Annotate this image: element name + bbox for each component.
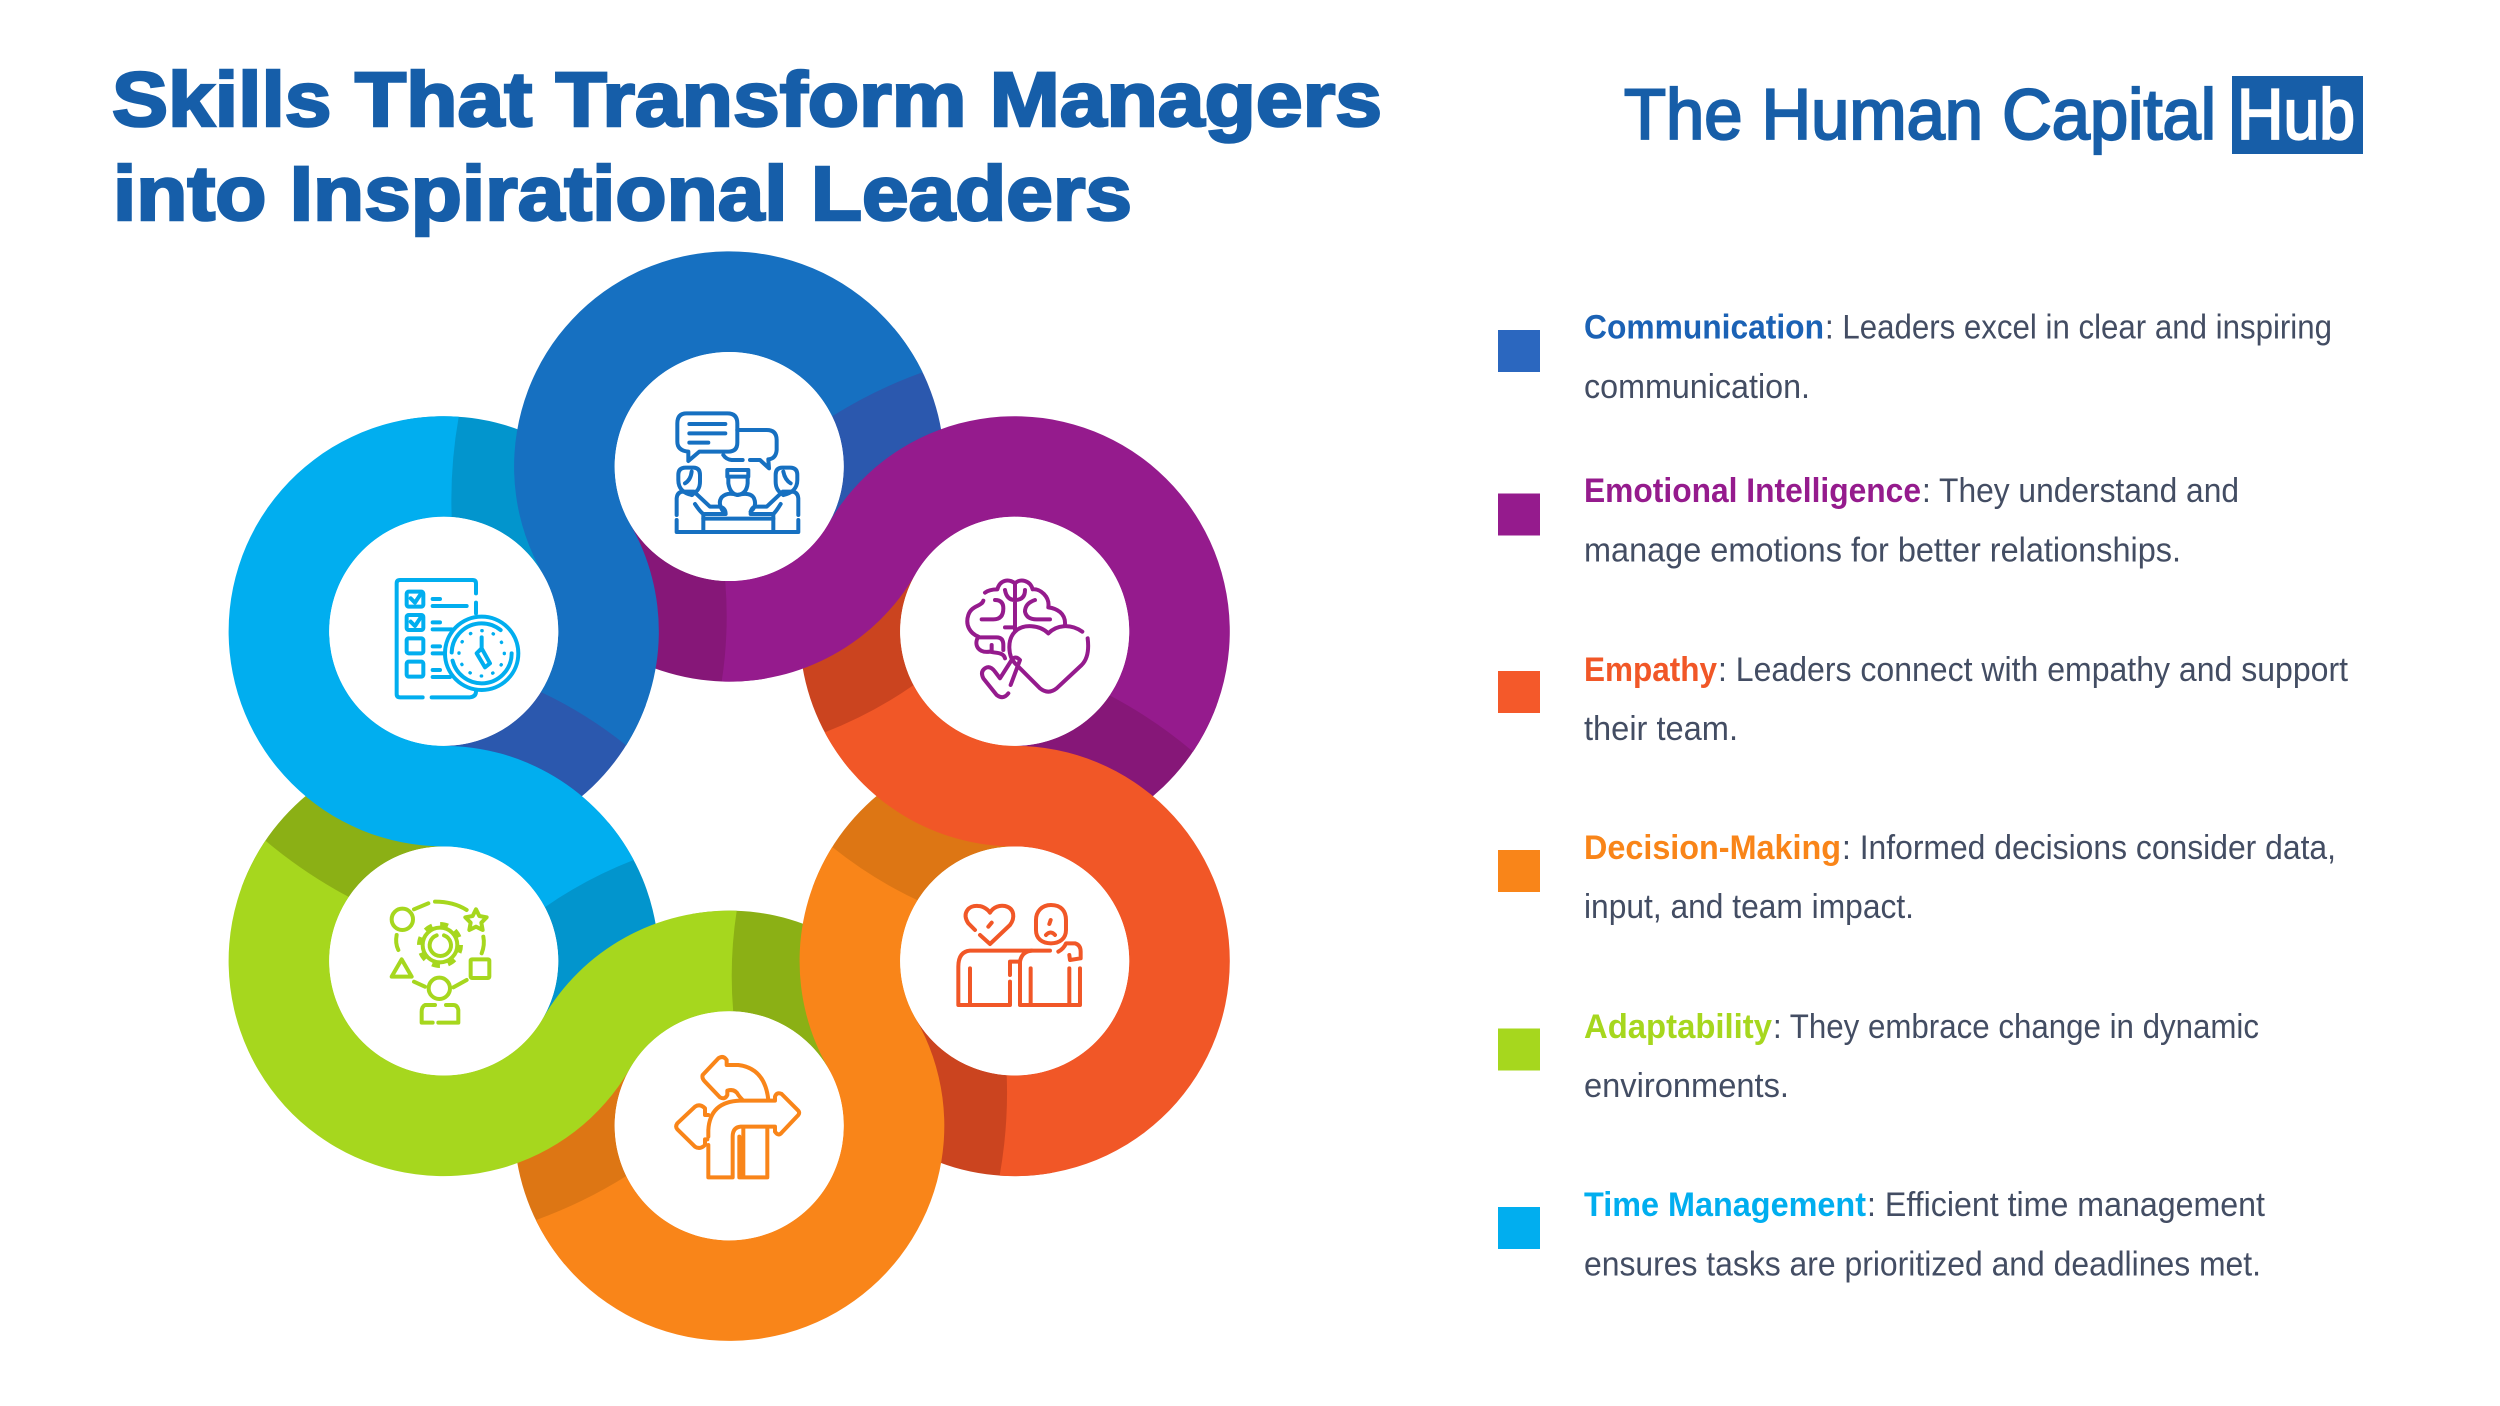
ribbon: emotional intelligence (666, 337, 1298, 938)
ribbon: empathy (677, 635, 1309, 1236)
logo: The Human Capital Hub: Hub (2237, 76, 2355, 155)
legend: time management: : Efficient time management (1867, 1186, 2266, 1224)
legend: communication: Communication (1584, 308, 1824, 346)
legend: adaptability: environments. (1584, 1067, 1789, 1105)
legend: decision-making: : Informed decisions consider data, (1842, 829, 2336, 867)
ribbon dark ends (181, 315, 1277, 1277)
icon: empathy people and heart (958, 905, 1081, 1005)
icon: emotional intelligence brain and heart (967, 581, 1088, 697)
title (112, 57, 1382, 237)
legend: decision-making (1498, 829, 2336, 926)
logo: The Human Capital Hub: The Human Capital (1624, 76, 2216, 155)
legend: empathy: their team. (1584, 710, 1738, 748)
icon: decision arrows (676, 1057, 799, 1177)
legend: decision-making: input, and team impact. (1584, 888, 1914, 926)
title: into Inspirational Leaders (113, 151, 1132, 237)
legend: empathy (1498, 651, 2349, 748)
icon: adaptability gear and shapes (392, 902, 489, 1023)
legend: empathy: Empathy (1584, 651, 1717, 689)
ribbon: decision-making (536, 847, 944, 1341)
ribbon: time management (150, 356, 782, 957)
legend: time management: Time Management (1584, 1186, 1866, 1224)
white icon discs (329, 352, 1129, 1240)
ribbon: adaptability (161, 654, 793, 1255)
rings and discs (150, 251, 1309, 1341)
ribbon: communication (514, 251, 923, 745)
legend: adaptability: Adaptability (1584, 1008, 1772, 1046)
diagram: six interlocking ribbon rings (150, 251, 1309, 1341)
title: Skills That Transform Managers (112, 57, 1382, 143)
legend: communication: communication. (1584, 368, 1810, 406)
icon: checklist and clock (397, 580, 518, 697)
legend: emotional intelligence: Emotional Intelligence (1584, 472, 1921, 510)
legend: time management: ensures tasks are prioritized and deadlines met. (1584, 1246, 2261, 1284)
legend: communication: : Leaders excel in clear and inspiring (1825, 308, 2332, 346)
legend: time management (1498, 1186, 2266, 1284)
legend: empathy: : Leaders connect with empathy and support (1718, 651, 2349, 689)
legend: emotional intelligence (1498, 472, 2239, 570)
legend: communication (1498, 308, 2332, 406)
legend: adaptability (1498, 1008, 2259, 1105)
legend: emotional intelligence: : They understand and (1922, 472, 2239, 510)
legend: adaptability: : They embrace change in dynamic (1773, 1008, 2259, 1046)
icon: team conversation (677, 413, 798, 532)
legend: decision-making: Decision-Making (1584, 829, 1841, 867)
legend: emotional intelligence: manage emotions for better relationships. (1584, 532, 2181, 570)
